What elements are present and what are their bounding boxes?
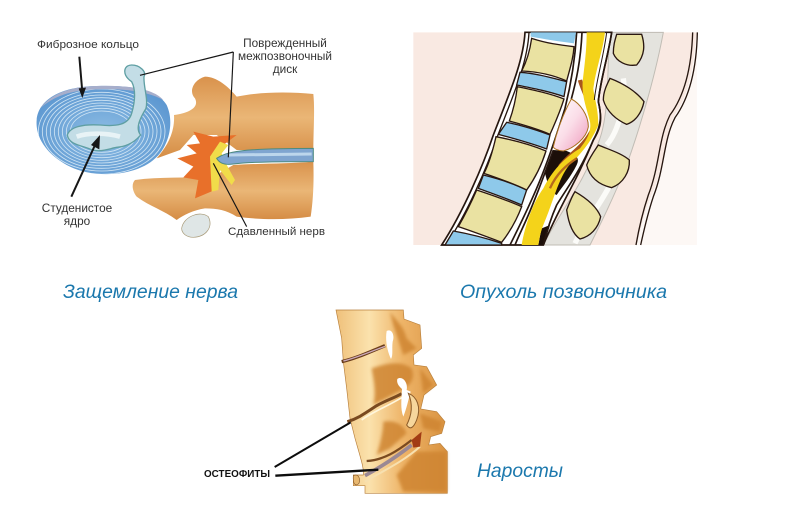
compressed nerve yellow (210, 142, 235, 192)
intervertebral disc side (217, 148, 313, 164)
panel: osteophytes diagram (275, 310, 447, 493)
herniated nucleus (67, 65, 147, 151)
label: damaged disc: межпозвоночный (238, 49, 332, 63)
dark canal under tumor (538, 150, 578, 245)
vertebral bodies (458, 38, 574, 242)
label: damaged disc (238, 36, 332, 76)
caption: pinched nerve: Защемление нерва (63, 281, 238, 303)
vertebra upper body (157, 77, 314, 158)
label: nucleus (42, 201, 113, 228)
panel: pinched nerve diagram (37, 52, 314, 237)
compressed cord fibres (560, 80, 593, 167)
label: nucleus: ядро (64, 214, 91, 228)
label: compressed nerve: Сдавленный нерв (228, 226, 325, 238)
foramina (386, 330, 411, 417)
label: damaged disc: Поврежденный (243, 36, 327, 50)
label: nucleus: Студенистое (42, 201, 113, 215)
back tissue (543, 32, 663, 245)
canal walls (543, 32, 612, 245)
discs (531, 32, 576, 43)
tumor (553, 99, 588, 151)
label: fibrous ring: Фиброзное кольцо (37, 39, 139, 51)
spinous processes (567, 34, 644, 239)
facet (407, 393, 419, 428)
facet nub (182, 214, 210, 237)
panel: spinal tumor diagram (413, 32, 697, 245)
disc lines (342, 346, 420, 482)
shading (372, 312, 447, 492)
fibrous ring disc (37, 86, 170, 174)
skin line (636, 32, 697, 245)
leader lines (71, 52, 247, 227)
caption: bone growths: Наросты (477, 460, 563, 482)
caption: spinal tumor: Опухоль позвоночника (460, 281, 667, 303)
label: damaged disc: диск (273, 62, 298, 76)
leader lines (275, 422, 378, 476)
irritated zone (177, 132, 237, 198)
infographic canvas (36, 32, 698, 494)
osteophyte spur (353, 475, 360, 485)
background (413, 32, 697, 245)
vertebra lower body (133, 162, 314, 220)
spinal cord yellow (522, 32, 605, 245)
spine column (336, 310, 447, 493)
label: osteophytes: ОСТЕОФИТЫ (204, 469, 270, 480)
column white (442, 32, 612, 245)
